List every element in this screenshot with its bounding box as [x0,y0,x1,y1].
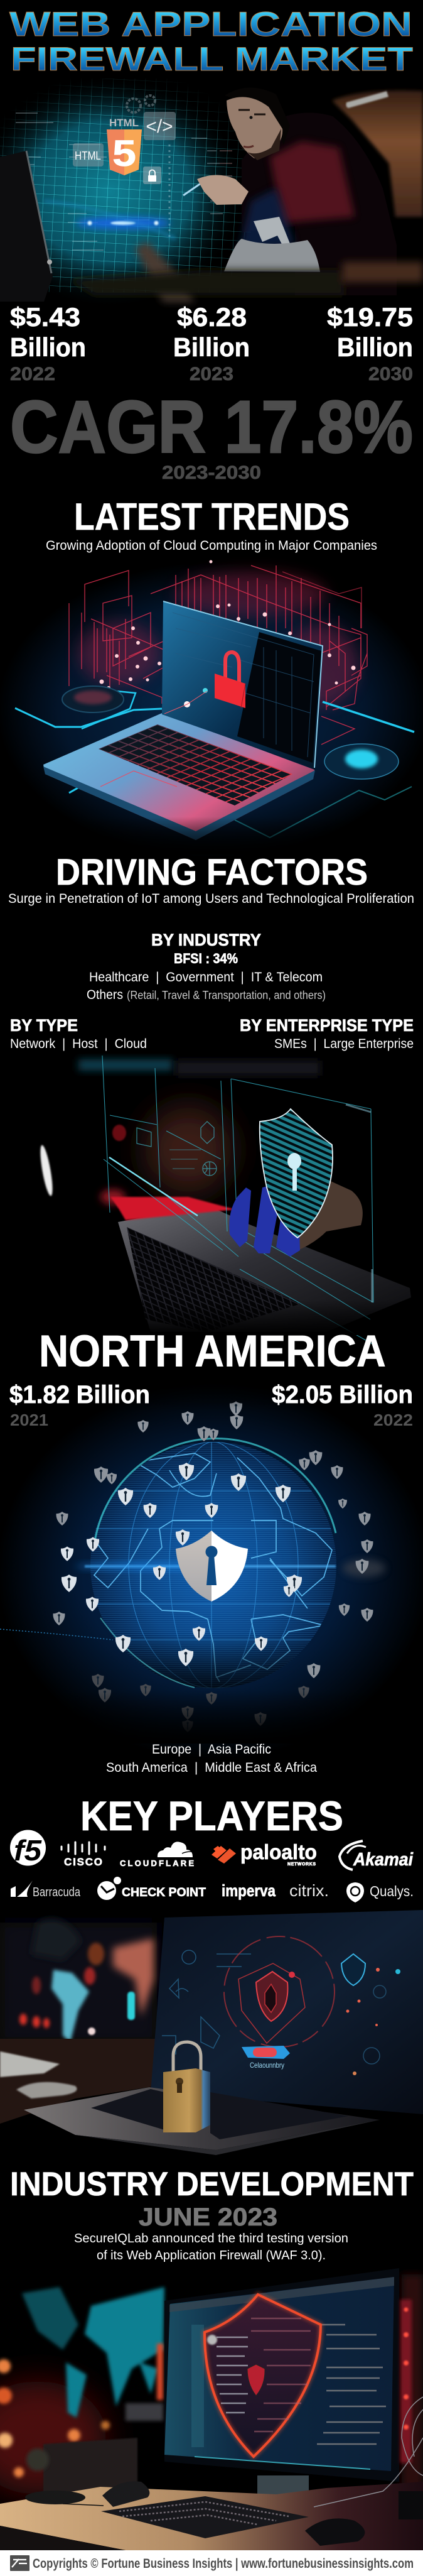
laptop body [118,1205,411,1332]
title: FIREWALL MARKET [11,41,413,78]
hand [229,1175,363,1257]
logo: f5 [10,1830,46,1867]
stat 2030: $19.75 [327,302,413,332]
neon circuit lines [15,691,414,838]
screen white glare [38,1144,55,1197]
red padlock on screen [215,652,245,708]
logo: check point [97,1877,206,1900]
central shield [176,1531,248,1602]
segment: by enterprise type: BY ENTERPRISE TYPE [240,1016,414,1035]
heading: driving factors: DRIVING FACTORS [56,852,368,893]
illustration: hand on laptop with shield hologram [39,1055,411,1345]
heading: latest trends [46,496,377,553]
holographic grid [0,79,251,292]
status button: Celaounnbry [250,2061,284,2070]
monitor [164,2268,399,2482]
segment: by industry: Others [87,988,123,1002]
logo: akamai: Akamai [353,1850,414,1870]
logo: qualys: Qualys. [370,1883,414,1899]
footer logo [10,2555,29,2571]
HTML5 badge: HTML [109,117,139,129]
segment: by type [10,1016,147,1051]
stat 2022 [10,302,86,385]
monitor [151,1910,423,2114]
stat 2022: Billion [10,332,86,362]
gold padlock [163,2042,210,2132]
segment: by industry: (Retail, Travel & Transportation, and others) [127,989,326,1001]
logo: f5: f5 [14,1834,43,1867]
code lines [16,113,232,250]
light streaks [44,201,176,239]
other regions: Europe | Asia Pacific [152,1742,271,1757]
globe sphere [90,1442,336,1688]
blurred foreground hand [135,242,195,302]
heading: latest trends: LATEST TRENDS [74,496,350,538]
title: WEB APPLICATION [9,4,412,43]
globe rim [94,1438,336,1546]
illustration: cybersecurity dashboard with gold padlock [0,1910,423,2155]
cables [314,2397,423,2507]
logo: barracuda [11,1880,81,1899]
code tag tile: </> [146,116,173,137]
orbit [0,1629,113,1640]
desk [69,262,423,295]
code lines [317,2325,386,2444]
right disc [324,744,399,779]
white keyboard [0,2051,60,2077]
logo: citrix: citrix. [289,1881,329,1900]
continent outlines [94,1453,332,1682]
regional value: 2021 [9,1381,150,1429]
logo: cloudflare [120,1842,194,1868]
regional value: 2021: $1.82 Billion [9,1381,150,1409]
logo: check point: CHECK POINT [122,1886,206,1899]
code tag tile [144,112,176,140]
stat 2022: 2022 [10,364,55,385]
stat 2023: $6.28 [177,302,247,332]
segment: by industry: BFSI : 34% [174,951,238,966]
foreground monitor [0,151,53,302]
red circuit glow [78,572,358,707]
shield [205,2295,321,2457]
notebook [224,239,320,272]
heading: industry development [10,2166,414,2262]
small red shield [247,2364,265,2396]
man: lower hand [254,217,292,251]
hologram details [137,1122,217,1176]
logo: palo alto networks [212,1840,317,1867]
stat 2030: Billion [337,332,413,362]
room glow [0,2274,423,2494]
status button [242,2046,290,2070]
mouse left [102,2481,149,2507]
footer [0,2550,423,2576]
HTML5 badge: 5 [112,133,136,174]
monitor stand [257,2475,330,2507]
glowing screen nodes [164,688,208,714]
logo: imperva: imperva [222,1881,276,1900]
keyboard [127,1227,301,1332]
holographic glow [0,75,245,308]
segment: by type: Network | Host | Cloud [10,1037,147,1051]
illustration: laptop with red padlock [0,560,423,858]
left disc [62,686,124,712]
stat 2030 [327,302,413,385]
title [9,4,413,78]
red side lights [400,2300,412,2463]
heading: driving factors [8,852,414,906]
HTML tile [73,143,104,166]
segment: by type: BY TYPE [10,1016,78,1035]
hologram frames [102,1056,373,1345]
stat 2023: Billion [173,332,250,362]
heading: driving factors: Surge in Penetration of IoT among Users and Technological Proliferation [8,892,414,906]
gears [127,96,155,112]
light band [75,1559,385,1577]
map panel foot [126,2403,163,2421]
heading: north america: NORTH AMERICA [39,1327,386,1377]
market size stats [10,302,413,385]
man: hand with pen [183,175,249,205]
man: torso [242,112,397,295]
stat 2030: 2030 [368,364,413,385]
blurred wall map [0,1919,157,2042]
orange network dots [346,1968,400,2075]
regional value: 2021: 2021 [10,1411,48,1429]
shield hologram [259,1108,333,1238]
segment: by enterprise type [240,1016,414,1051]
logo: qualys [346,1882,414,1902]
dashed red ring [224,1936,335,2047]
regional value: 2022: 2022 [373,1411,413,1429]
heading: industry development: of its Web Application Firewall (WAF 3.0). [97,2249,326,2262]
heading: latest trends: Growing Adoption of Cloud Computing in Major Companies [46,538,377,553]
logo: palo alto networks: paloalto [240,1840,317,1864]
laptop screen [162,601,323,768]
logo: cloudflare: CLOUDFLARE [120,1858,194,1868]
globe bottom shade [126,1636,311,1688]
key player logos [10,1830,414,1902]
laptop [24,2087,380,2155]
blurred world map [22,2287,164,2418]
stat 2023: 2023 [190,364,233,385]
globe grid [88,1442,339,1688]
bokeh lights [0,2344,163,2477]
keyboard [99,724,292,805]
lamp [346,91,388,108]
segment: by industry [87,931,326,1002]
blurred screen top [78,1059,173,1071]
keyboard [101,2496,309,2538]
red bar [110,1197,235,1220]
segment: by enterprise type: SMEs | Large Enterprise [274,1037,414,1051]
logo: akamai [340,1841,414,1870]
CAGR: 2023-2030 [162,462,261,483]
blue shield [341,1954,365,1985]
HTML5 badge [107,117,142,175]
laptop base [43,713,315,840]
stat 2023 [173,302,250,385]
regional value: 2022 [272,1381,413,1429]
HTML tile: HTML [75,150,101,162]
illustration: monitor with glowing shield [0,2268,423,2550]
mouse [16,2082,77,2098]
illustration: digital globe with shields [0,1367,423,1759]
regional value: 2022: $2.05 Billion [272,1381,413,1409]
logo: cisco: CISCO [64,1856,102,1868]
man: hair and face [225,87,290,160]
blurred screen glow [144,1106,232,1194]
glowing nodes [99,560,355,690]
heading: industry development: SecureIQLab announced the third testing version [74,2232,348,2246]
other regions [106,1742,317,1775]
logo: barracuda: Barracuda [33,1886,81,1899]
small shields [53,1401,373,1732]
other regions: South America | Middle East & Africa [106,1760,317,1775]
orange wall [332,90,423,217]
heading: key players: KEY PLAYERS [80,1793,343,1839]
lock tile [143,166,161,184]
stat 2022: $5.43 [10,302,80,332]
wall bottom and desk [0,2039,157,2124]
box [43,2438,137,2494]
mouse right [305,2518,365,2546]
desk [0,2482,423,2550]
red circuit wireframes [69,565,367,745]
logo: palo alto networks: NETWORKS [287,1862,316,1867]
segment: by industry: BY INDUSTRY [151,931,261,949]
segment: by industry: Healthcare | Government | IT & Telecom [89,970,323,985]
logo: cisco [62,1842,105,1868]
heading: industry development: JUNE 2023 [139,2203,277,2231]
blue circuitry [162,1950,251,2055]
hero illustration: developer at holographic HTML screen [0,75,423,308]
red shield [238,1963,305,2043]
